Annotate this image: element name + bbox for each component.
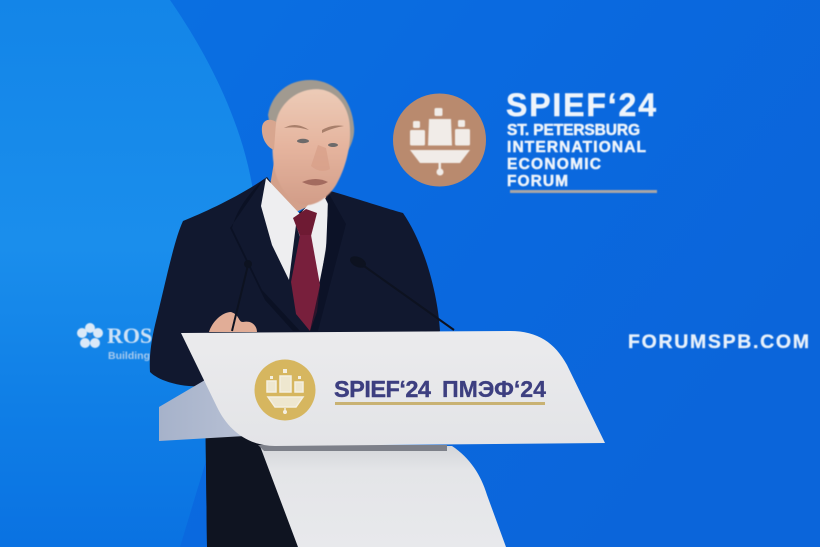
lectern stand <box>260 446 506 547</box>
sponsor logo: partly hidden by speaker: ROS <box>107 323 152 348</box>
neck <box>270 150 330 212</box>
lectern side wing <box>159 380 245 441</box>
sponsor logo: partly hidden by speaker: Building <box>108 350 150 362</box>
trouser and lower suit shadow <box>205 385 298 547</box>
logo: SPIEF copper emblem <box>393 94 486 186</box>
heading: forum logotype on wall <box>506 87 657 193</box>
tie <box>291 209 320 331</box>
text: website address: FORUMSPB.COM <box>628 331 809 353</box>
lectern: podium <box>159 331 605 547</box>
sponsor logo: partly hidden by speaker <box>77 323 152 362</box>
suit <box>150 177 440 547</box>
head <box>262 80 354 205</box>
lapels shading <box>230 179 300 331</box>
shirt collar <box>261 178 328 290</box>
lectern text: SPIEF‘24 <box>334 376 431 402</box>
heading: forum logotype on wall: ECONOMIC <box>507 156 601 173</box>
hand <box>209 312 257 332</box>
heading: forum logotype on wall: ST. PETERSBURG <box>507 122 640 139</box>
lectern emblem: gold <box>254 360 316 420</box>
heading: forum logotype on wall: INTERNATIONAL <box>507 139 646 156</box>
speaker: man in dark suit <box>150 80 454 547</box>
heading: forum logotype on wall: FORUM <box>507 173 568 190</box>
microphones <box>232 255 454 331</box>
lectern top panel <box>181 331 605 446</box>
heading: forum logotype on wall: SPIEF‘24 <box>506 87 656 123</box>
lectern: podium: ПМЭФ‘24 <box>442 376 546 402</box>
gold underline <box>335 402 545 405</box>
